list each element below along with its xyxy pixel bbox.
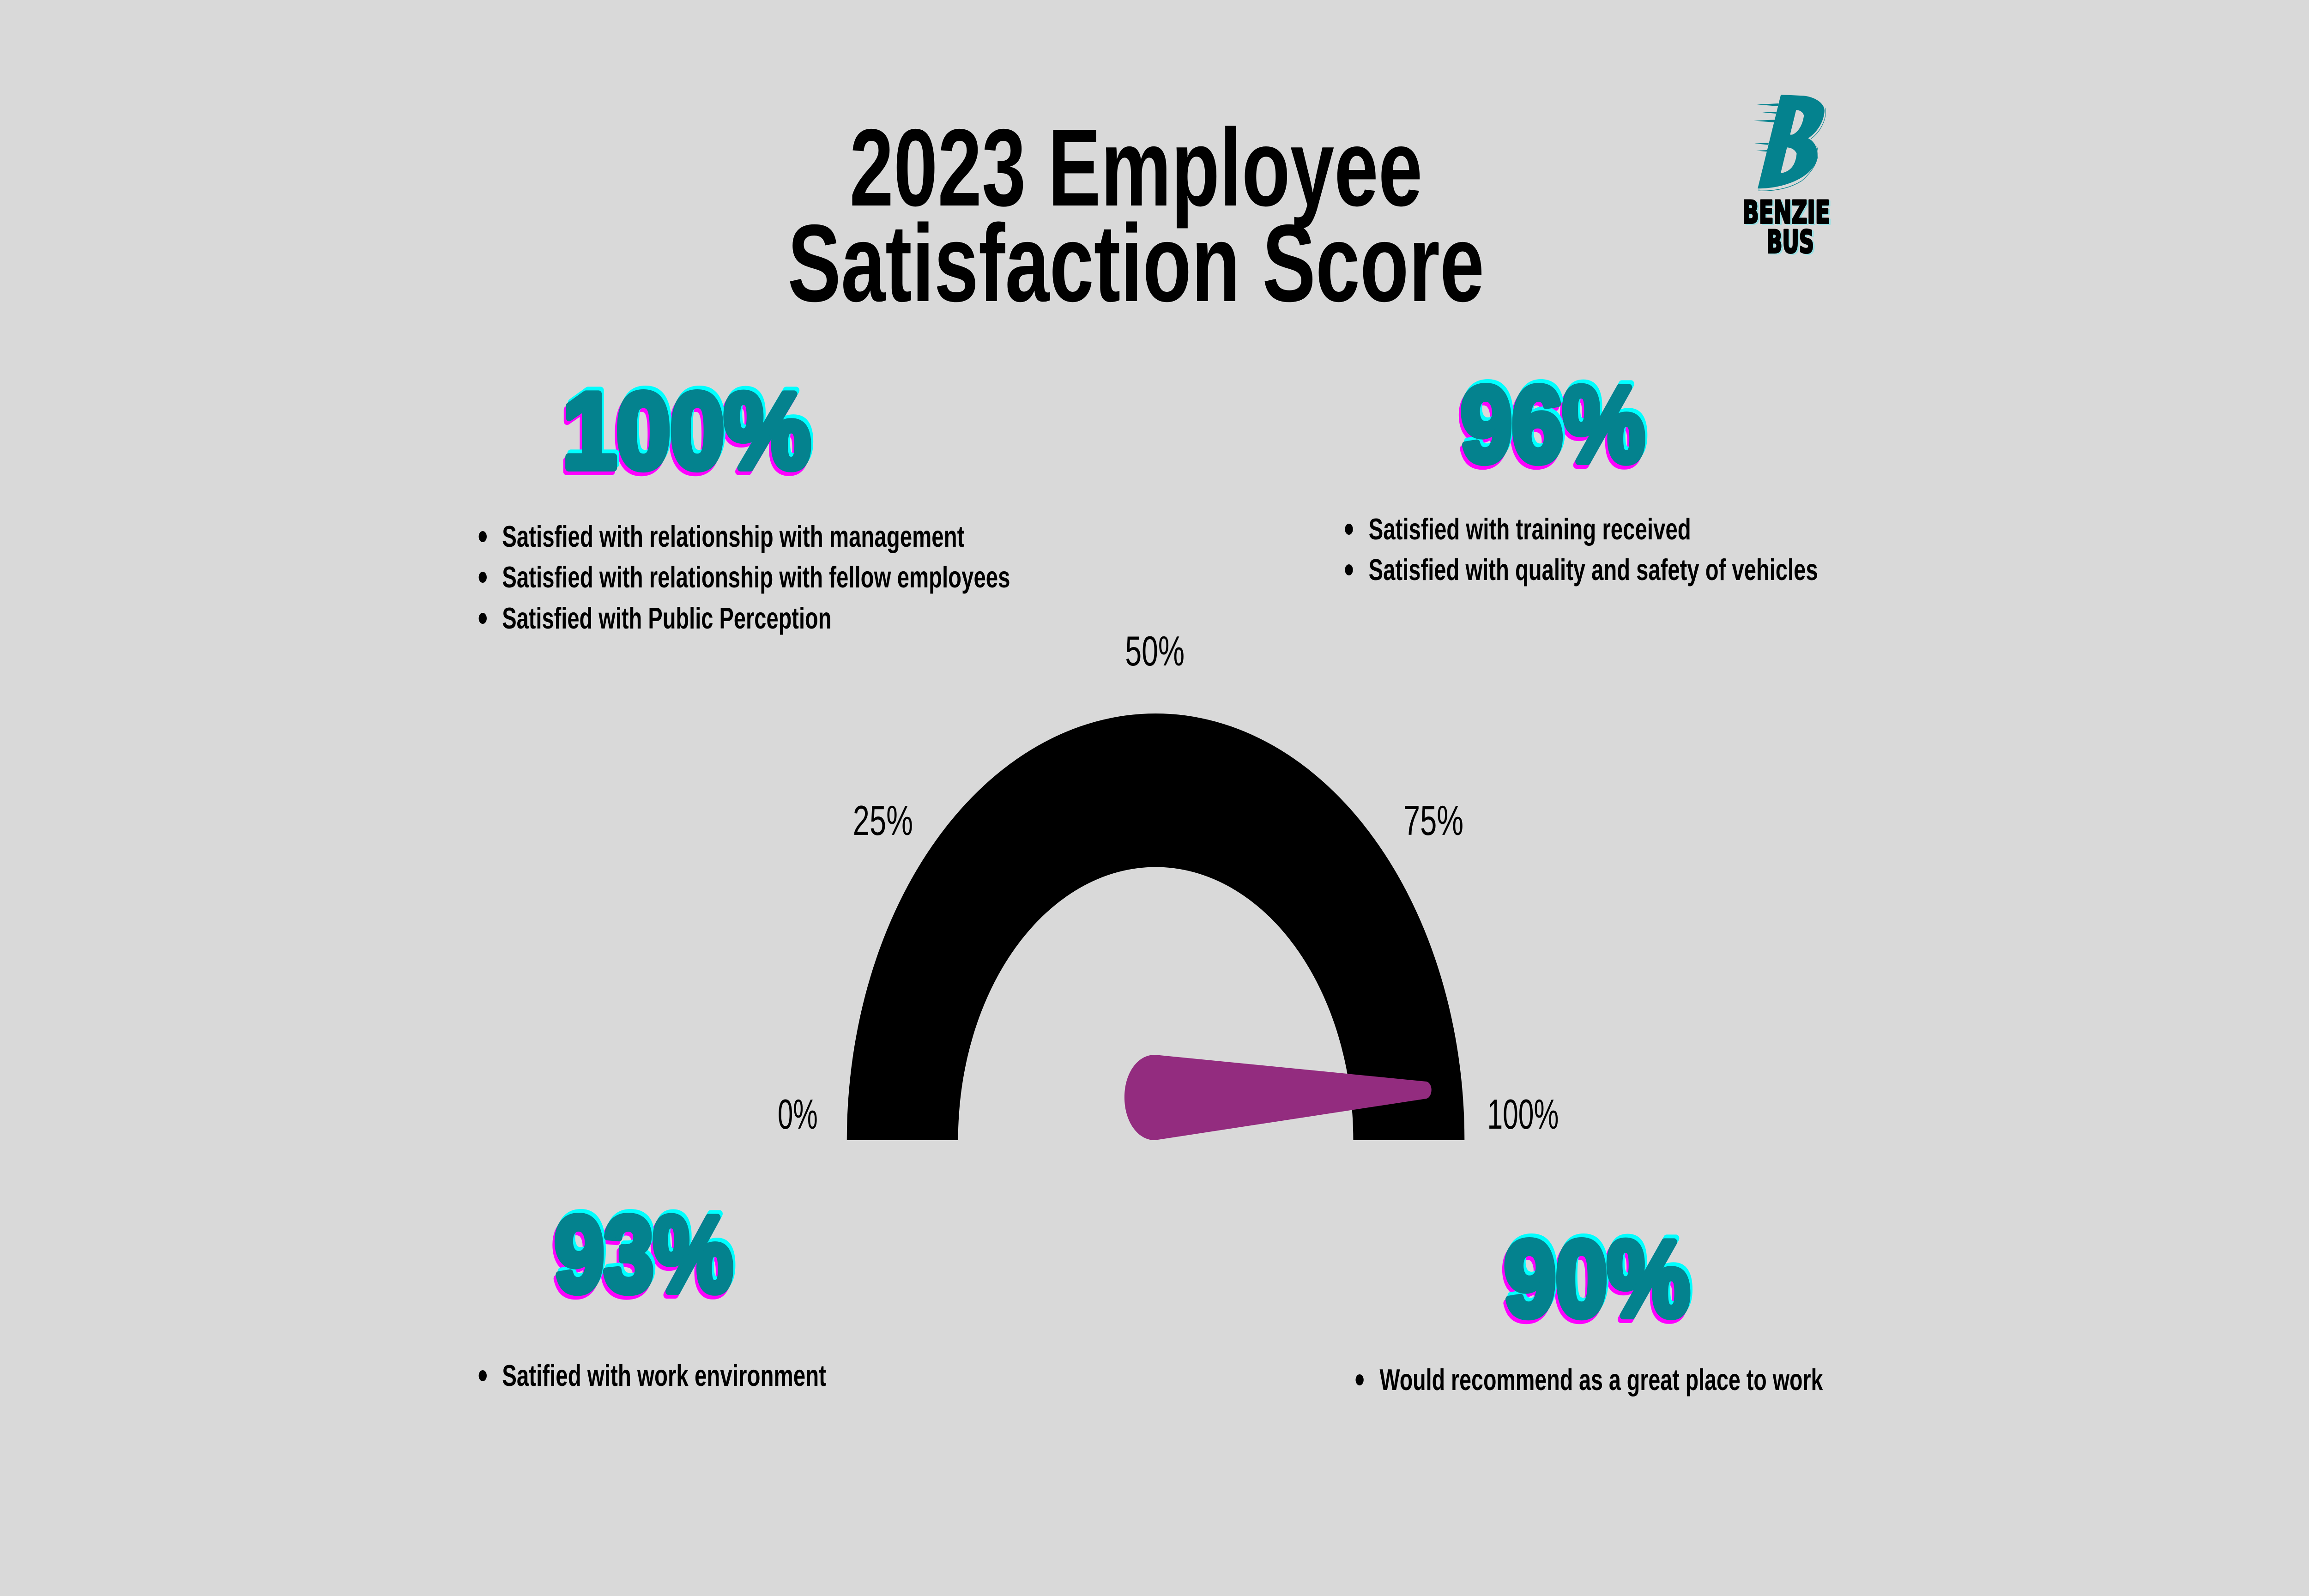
panel: 96% satisfaction bbox=[1345, 364, 1818, 587]
bullet list: 96% items: Satisfied with quality and safety of vehicles bbox=[1369, 554, 1818, 587]
logo wordmark: BENZIE bbox=[1742, 194, 1830, 230]
icon: speeding letter B bbox=[1754, 95, 1825, 191]
logo wordmark: BUS bbox=[1766, 224, 1814, 260]
stat: 96%: 96% bbox=[1461, 364, 1644, 484]
gauge scale labels: 25% bbox=[853, 797, 913, 844]
stat: 93%: 93% bbox=[555, 1194, 732, 1314]
logo wordmark bbox=[1742, 194, 1830, 260]
bullet list: 90% items: Would recommend as a great place to work bbox=[1380, 1364, 1823, 1397]
bullet list: 96% items: Satisfied with training received bbox=[1369, 513, 1691, 546]
gauge chart bbox=[778, 627, 1559, 1140]
gauge scale labels: 50% bbox=[1125, 627, 1185, 674]
panel: 90% satisfaction bbox=[1355, 1219, 1823, 1397]
bullet list: 100% items: Satisfied with relationship with fellow employees bbox=[502, 561, 1010, 594]
gauge arc bbox=[847, 713, 1464, 1140]
bullet list: 100% items: Satisfied with relationship with management bbox=[502, 520, 964, 554]
panel: 100% satisfaction bbox=[479, 371, 1010, 635]
stat: 100%: 100% bbox=[562, 371, 810, 490]
panel: 93% satisfaction bbox=[479, 1194, 826, 1393]
gauge scale labels: 75% bbox=[1403, 797, 1463, 844]
gauge scale labels: 100% bbox=[1487, 1090, 1559, 1137]
bullet list: 93% items: Satified with work environment bbox=[502, 1360, 826, 1393]
gauge scale labels: 0% bbox=[778, 1090, 818, 1137]
stat: 90%: 90% bbox=[1504, 1219, 1690, 1338]
title: 2023 Employee bbox=[850, 107, 1422, 230]
title bbox=[788, 107, 1484, 325]
bullet list: 96% items bbox=[1345, 513, 1818, 587]
logo: Benzie Bus bbox=[1742, 95, 1830, 260]
title: Satisfaction Score bbox=[788, 202, 1484, 325]
bullet list: 100% items bbox=[479, 520, 1010, 635]
gauge scale labels bbox=[778, 627, 1559, 1137]
gauge needle bbox=[1124, 1055, 1432, 1140]
bullet list: 100% items: Satisfied with Public Perception bbox=[502, 602, 831, 635]
